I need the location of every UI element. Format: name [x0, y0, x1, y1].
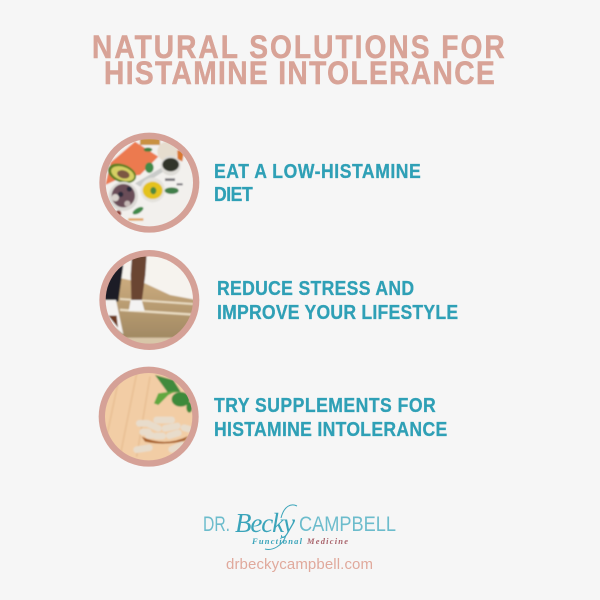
text: reduce stress and improve your lifestyle: [217, 277, 458, 323]
icon: healthy food photo in ring: [97, 133, 203, 233]
website url: drbeckycampbell.com: [226, 556, 373, 573]
text: try supplements for histamine intolerance: [214, 394, 447, 440]
logo: Dr. Becky Campbell Functional Medicine: Medicine: [306, 536, 348, 546]
title: [92, 30, 505, 91]
title: NATURAL SOLUTIONS FOR: [92, 30, 505, 65]
logo: Dr. Becky Campbell Functional Medicine: CAMPBELL: [299, 513, 396, 536]
infographic canvas: [94, 35, 504, 572]
text: eat a low-histamine diet: [214, 160, 421, 205]
icon: walking on stairs photo in ring: [99, 250, 199, 350]
text: reduce stress and improve your lifestyle: REDUCE STRESS AND: [217, 277, 414, 299]
icon: supplement capsules photo in ring: [99, 367, 199, 467]
title: HISTAMINE INTOLERANCE: [104, 56, 495, 91]
logo: Dr. Becky Campbell Functional Medicine: Becky: [235, 508, 295, 538]
text: try supplements for histamine intolerance: TRY SUPPLEMENTS FOR: [214, 394, 436, 416]
logo: Dr. Becky Campbell Functional Medicine: DR.: [203, 513, 230, 536]
text: reduce stress and improve your lifestyle: IMPROVE YOUR LIFESTYLE: [217, 301, 458, 323]
text: try supplements for histamine intolerance: HISTAMINE INTOLERANCE: [214, 418, 447, 440]
logo: Dr. Becky Campbell Functional Medicine: [203, 505, 396, 549]
text: eat a low-histamine diet: DIET: [214, 183, 253, 205]
text: eat a low-histamine diet: EAT A LOW-HISTAMINE: [214, 160, 421, 182]
logo: Dr. Becky Campbell Functional Medicine: Functional: [251, 536, 303, 546]
